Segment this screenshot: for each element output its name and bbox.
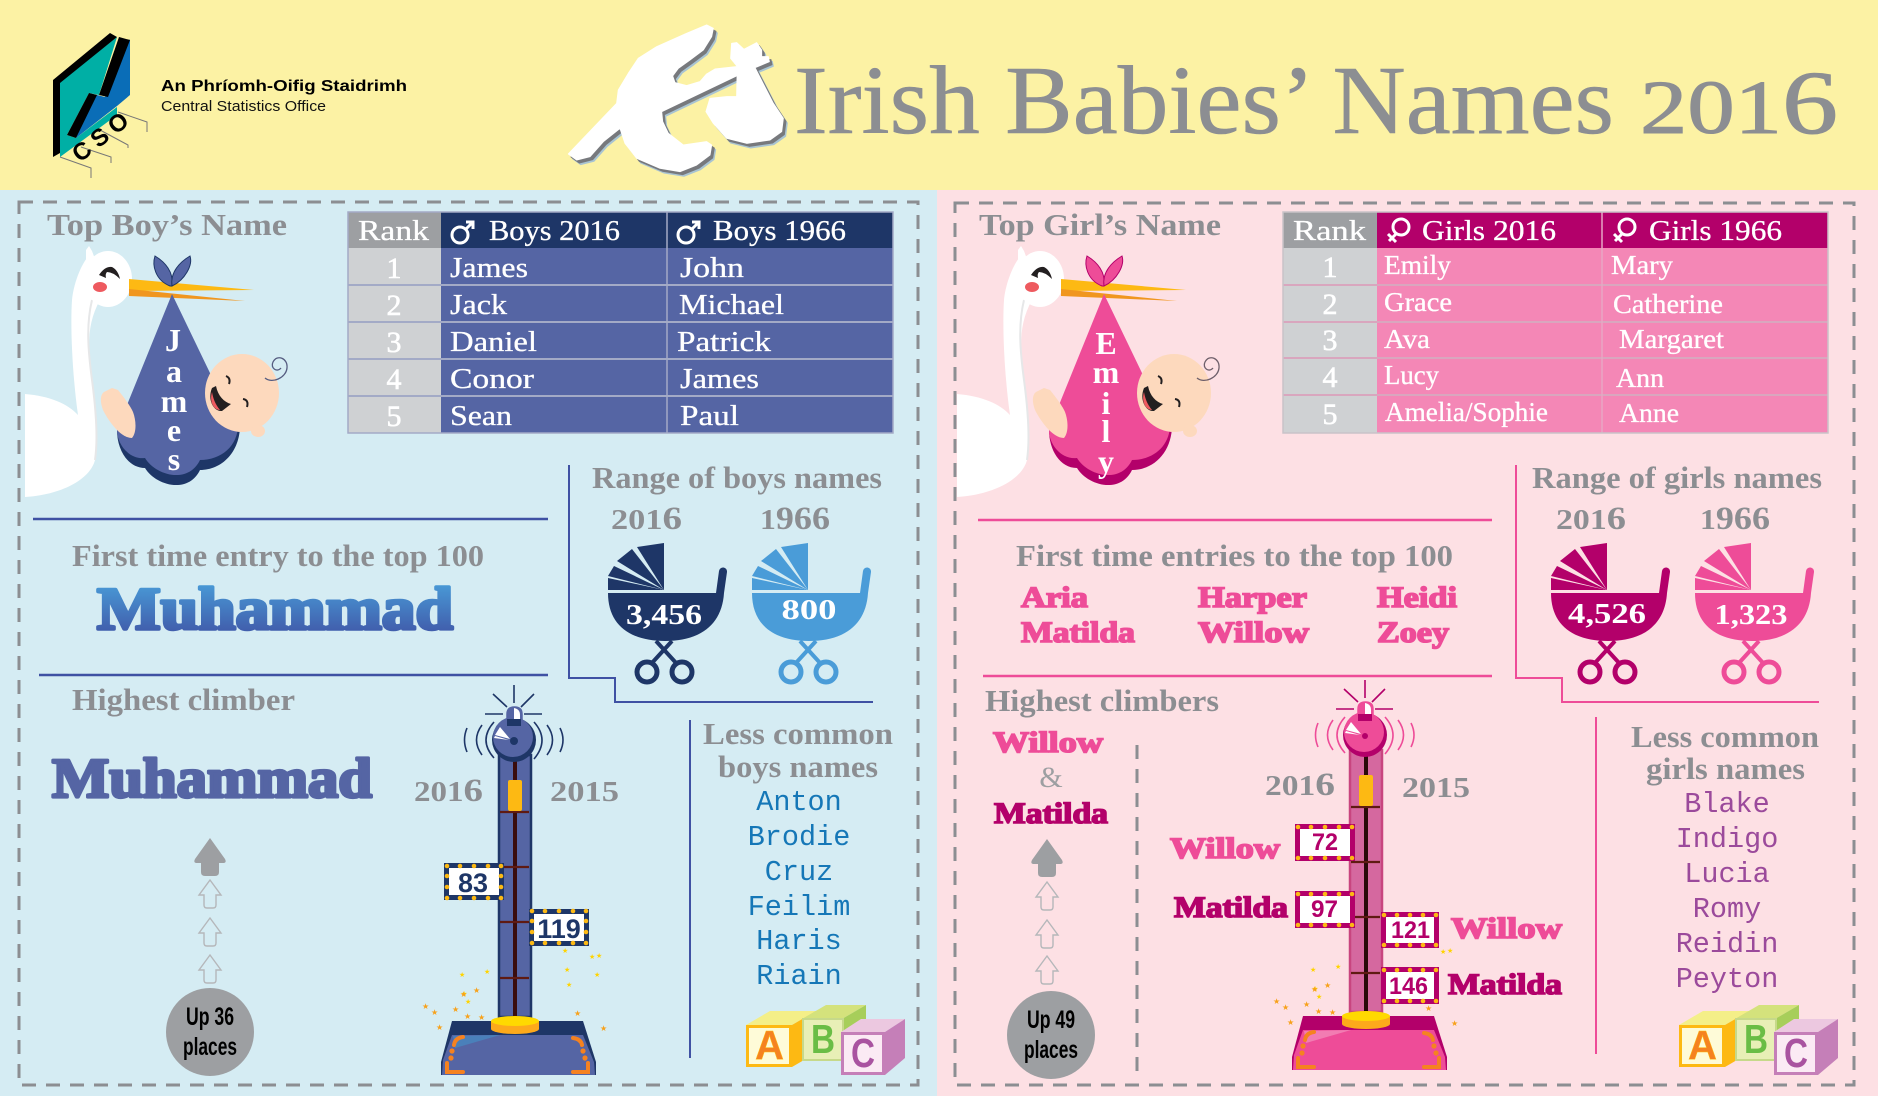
section: less common boys names: Cruz	[765, 856, 833, 889]
labels: climbers on the tower	[1170, 832, 1562, 1001]
section: less common boys names	[690, 716, 893, 1058]
icon: ABC blocks: A	[755, 1022, 784, 1068]
table: top girls names: Ava	[1384, 324, 1430, 354]
table: top boys names: Rank	[358, 215, 430, 247]
section: less common girls names	[1596, 717, 1819, 1054]
table: top girls names: Emily	[1384, 250, 1452, 280]
labels: climbers on the tower: Matilda	[1448, 968, 1562, 1001]
heading: top boy's name: Top Boy’s Name	[47, 207, 287, 242]
section: less common boys names: Riain	[756, 960, 842, 993]
section: first time entry: Muhammad	[97, 576, 453, 642]
section: first time entries: Heidi	[1377, 581, 1457, 614]
table: top boys names: 5	[386, 400, 402, 433]
section: less common girls names: Romy	[1693, 893, 1761, 926]
table: top boys names: Conor	[450, 363, 534, 395]
table: top girls names: Catherine	[1613, 289, 1723, 319]
illustration: stork carrying James: J	[165, 322, 181, 358]
table: top girls names: 4	[1322, 361, 1338, 394]
section: highest climber: 2015	[550, 777, 619, 808]
section: less common girls names: Indigo	[1676, 823, 1778, 856]
table: top boys names: James	[680, 363, 759, 395]
table: top girls names: 5	[1322, 398, 1338, 431]
section: range of boys names: Range of boys names	[592, 460, 882, 495]
icon: ABC blocks: B	[1744, 1016, 1768, 1062]
labels: climbers on the tower: Matilda	[1174, 891, 1288, 924]
table: top girls names: Grace	[1384, 287, 1452, 317]
sign: 83: 83	[458, 868, 488, 898]
arrows: climbing up	[1031, 839, 1063, 984]
heading: top girl's name: Top Girl’s Name	[979, 207, 1221, 242]
table: top girls names: Mary	[1611, 250, 1674, 280]
section: less common boys names: boys names	[718, 749, 878, 784]
section: range of boys names: 2016	[611, 501, 682, 537]
icon: pram 2016	[608, 543, 727, 682]
panel border: girls	[955, 203, 1854, 1085]
section: less common boys names: Feilim	[748, 891, 850, 924]
table: top boys names: Daniel	[450, 326, 537, 358]
table: top boys names: Patrick	[677, 326, 772, 358]
table: top girls names: Girls 1966	[1649, 215, 1782, 247]
years: 2016	[414, 773, 483, 809]
icon: pram 1966	[1695, 543, 1814, 682]
section: first time entries: Zoey	[1377, 616, 1449, 649]
icon: CSO logo: CSO	[67, 107, 134, 168]
illustration: stork carrying James: m	[161, 383, 188, 419]
table: top boys names: 4	[386, 363, 402, 396]
labels: climbers on the tower: Willow	[1451, 912, 1562, 945]
table: top girls names: Lucy	[1384, 360, 1439, 390]
illustration: high striker tower: ★★★★★★★	[1310, 942, 1453, 1001]
section: less common boys names: Less common	[703, 716, 893, 751]
icon: pram 1966: 800	[782, 594, 836, 626]
arrows: climbing up	[194, 838, 226, 983]
sign: 97	[1295, 891, 1355, 928]
labels: climbers on the tower: Willow	[1170, 832, 1280, 865]
icon: ABC blocks: A	[1688, 1022, 1717, 1068]
callout: up 49 places: Up 49	[1027, 1006, 1075, 1034]
table: top girls names	[1283, 212, 1828, 433]
sign: 97: 97	[1311, 896, 1338, 923]
header banner	[53, 25, 1838, 178]
illustration: stork carrying Emily: y	[1098, 443, 1114, 479]
table: top girls names: 2	[1322, 288, 1338, 321]
illustration: stork carrying Emily: E	[1095, 325, 1117, 361]
illustration: stork carrying James: a	[166, 353, 182, 389]
callout: up 49 places: places	[1024, 1036, 1078, 1064]
table: top boys names: John	[680, 252, 745, 284]
illustration: stork carrying Emily: l	[1102, 413, 1111, 449]
table: top girls names: Anne	[1619, 398, 1679, 428]
section: first time entries: Willow	[1198, 616, 1309, 649]
section: highest climbers: 2015	[1402, 773, 1470, 804]
section: first time entries: Matilda	[1021, 616, 1135, 649]
callout: up 49 places	[1007, 991, 1095, 1079]
panel: boys	[19, 202, 918, 1085]
table: top girls names: Amelia/Sophie	[1385, 397, 1548, 427]
section: range of girls names: Range of girls names	[1532, 460, 1822, 495]
table: top girls names: 1	[1322, 251, 1338, 284]
title: 201 6	[1640, 54, 1838, 153]
table: top boys names: Paul	[680, 400, 739, 432]
sign: 119	[529, 909, 589, 946]
icon: ABC blocks	[746, 1005, 905, 1076]
section: less common girls names: Less common	[1631, 719, 1819, 754]
section: less common boys names: Anton	[756, 786, 842, 819]
text: organisation name: An Phríomh-Oifig Staidrimh	[161, 78, 407, 95]
sign: 83	[444, 863, 504, 900]
section: first time entries: First time entries to the top 100	[1016, 538, 1453, 573]
table: top boys names: Boys 1966	[713, 215, 846, 247]
section: range of boys names: 1966	[760, 501, 830, 537]
icon: ABC blocks	[1679, 1005, 1838, 1076]
section: less common girls names: Reidin	[1676, 928, 1778, 961]
icon: stork silhouette	[568, 25, 787, 176]
illustration: stork carrying James	[25, 246, 287, 497]
section: less common girls names: Lucia	[1684, 858, 1770, 891]
table: top boys names: Sean	[450, 400, 513, 432]
table: top girls names: Margaret	[1619, 324, 1725, 354]
callout: up 36 places	[166, 988, 254, 1076]
icon: ABC blocks: C	[1784, 1030, 1808, 1076]
callout: up 36 places: Up 36	[186, 1003, 234, 1031]
table: top girls names: Ann	[1616, 363, 1665, 393]
illustration: stork carrying James: e	[167, 412, 181, 448]
table: top girls names: 3	[1322, 324, 1338, 357]
sign: 119: 119	[537, 914, 581, 944]
illustration: stork carrying Emily: m	[1093, 354, 1120, 390]
table: top girls names: Girls 2016	[1422, 215, 1556, 247]
icon: pram 1966: 1,323	[1714, 599, 1788, 631]
table: top boys names: James	[450, 252, 528, 284]
section: first time entry: First time entry to the top 100	[72, 538, 484, 573]
table: top boys names: 2	[386, 289, 402, 322]
title: Irish Babies’ Names	[794, 47, 1614, 155]
sign: 146: 146	[1389, 973, 1428, 1000]
callout: up 36 places: places	[183, 1033, 237, 1061]
illustration: stork carrying Emily	[957, 246, 1219, 497]
section: first time entries: Aria	[1021, 581, 1088, 614]
illustration: high striker tower: ★★★★★★★★★★	[459, 947, 602, 1006]
section: first time entry	[33, 519, 548, 642]
section: highest climbers: Willow	[993, 726, 1103, 759]
sign: 121: 121	[1391, 917, 1430, 944]
section: highest climbers: &	[1039, 761, 1063, 794]
section: first time entries	[978, 520, 1492, 649]
panel border: boys	[19, 202, 918, 1085]
section: highest climbers: Matilda	[994, 797, 1108, 830]
icon: pram 2016	[1551, 543, 1670, 682]
section: highest climbers: Highest climbers	[985, 683, 1219, 718]
icon: ABC blocks: C	[851, 1030, 875, 1076]
table: top boys names	[348, 212, 893, 433]
sign: 121	[1381, 912, 1439, 948]
illustration: high striker tower	[422, 685, 607, 1075]
table: top boys names: 3	[386, 326, 402, 359]
illustration: stork carrying Emily: i	[1102, 385, 1111, 421]
section: less common girls names: Peyton	[1676, 963, 1778, 996]
sign: 146	[1381, 967, 1439, 1004]
illustration: high striker tower: ★★★★★★★★★★★★	[422, 986, 607, 1038]
table: top girls names: Rank	[1293, 215, 1367, 247]
text: organisation name: Central Statistics Office	[161, 98, 326, 115]
icon: pram 1966	[752, 543, 871, 682]
section: highest climber	[39, 675, 619, 1076]
section: less common boys names: Haris	[756, 925, 842, 958]
section: highest climber: Muhammad	[52, 748, 372, 810]
sign: 72: 72	[1312, 829, 1338, 856]
icon: ABC blocks: B	[811, 1016, 835, 1062]
table: top boys names: Michael	[679, 289, 784, 321]
icon: CSO logo	[53, 33, 147, 178]
section: range of girls names: 2016	[1556, 501, 1626, 537]
illustration: high striker tower: ★★★★★★★★★★★★	[1273, 981, 1458, 1033]
icon: pram 2016: 4,526	[1568, 598, 1646, 630]
text: organisation name	[161, 78, 407, 115]
panel: girls	[955, 203, 1854, 1085]
section: range of boys names	[569, 460, 882, 702]
illustration: stork carrying James: s	[168, 441, 180, 477]
table: top boys names: Jack	[450, 289, 508, 321]
icon: pram 2016: 3,456	[626, 599, 702, 631]
table: top boys names: 1	[386, 252, 402, 285]
sign: 72	[1295, 824, 1355, 861]
section: highest climbers	[983, 676, 1562, 1079]
years: 201 6	[1265, 767, 1335, 803]
section: highest climber: Highest climber	[72, 682, 295, 717]
section: range of girls names: 1966	[1700, 501, 1770, 537]
table: top boys names: Boys 2016	[489, 215, 620, 247]
section: first time entries: Harper	[1198, 581, 1307, 614]
section: range of girls names	[1516, 460, 1822, 702]
section: less common boys names: Brodie	[748, 821, 850, 854]
illustration: high striker tower	[1273, 680, 1458, 1070]
section: less common girls names: girls names	[1646, 751, 1805, 786]
section: less common girls names: Blake	[1684, 788, 1770, 821]
